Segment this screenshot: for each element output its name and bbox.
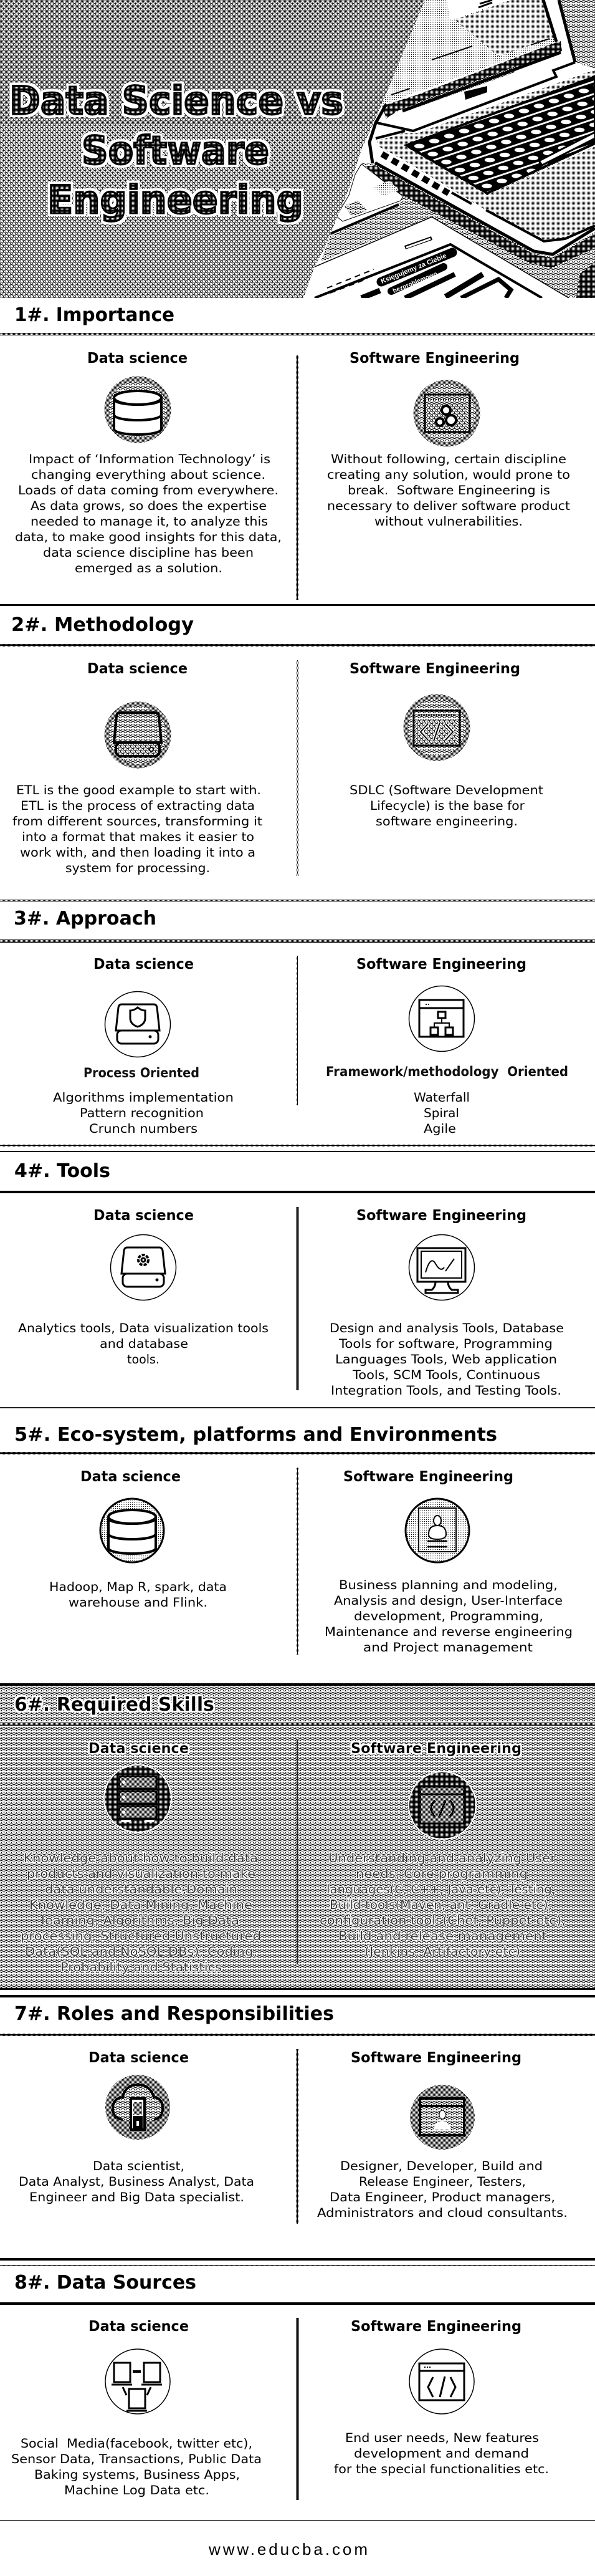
text: software engineering: creating any solution, would prone to bbox=[327, 468, 570, 482]
text: software engineering bbox=[325, 1578, 573, 1655]
list: software engineering: Agile bbox=[424, 1122, 456, 1136]
column title: software engineering: Software Engineering bbox=[350, 661, 520, 677]
column title: software engineering: Software Engineering bbox=[350, 350, 520, 367]
footer url: www.educba.com bbox=[208, 2540, 368, 2559]
text: software engineering: Build and release management bbox=[338, 1929, 547, 1943]
icon: database bbox=[105, 377, 171, 443]
text: software engineering: Languages Tools, Web application bbox=[335, 1352, 557, 1367]
column title: data science: Data science bbox=[88, 2319, 189, 2335]
column title: software engineering: Software Engineering bbox=[351, 1741, 521, 1757]
icon: networked computers bbox=[105, 2349, 170, 2414]
text: data science: Social Media(facebook, twitter etc), bbox=[21, 2436, 252, 2451]
text: data science bbox=[12, 783, 262, 875]
text: data science: work with, and then loading it into a bbox=[20, 845, 255, 860]
section 1: importance bbox=[0, 304, 595, 606]
icon: code window outline bbox=[409, 2349, 474, 2414]
text: data science: system for processing. bbox=[65, 861, 210, 875]
laptop photo: bezproblemowo bbox=[392, 271, 439, 295]
section 3: approach bbox=[0, 908, 595, 1152]
text: data science bbox=[11, 2436, 262, 2497]
list: software engineering: Spiral bbox=[424, 1106, 459, 1120]
list: data science: Algorithms implementation bbox=[53, 1090, 234, 1105]
text: software engineering: Tools, SCM Tools, Continuous bbox=[352, 1368, 540, 1382]
text: software engineering: Design and analysis Tools, Database bbox=[330, 1321, 564, 1335]
text: data science bbox=[15, 452, 282, 575]
panel background bbox=[0, 1686, 595, 1988]
text: data science: Knowledge about how to build data bbox=[24, 1851, 258, 1865]
column title: software engineering: Software Engineering bbox=[351, 2050, 521, 2066]
text: data science: Probability and Statistics bbox=[60, 1960, 222, 1974]
icon: database with texture bbox=[100, 1499, 164, 1562]
column title: data science: Data science bbox=[88, 2050, 189, 2066]
text: data science: As data grows, so does the expertise bbox=[31, 499, 267, 513]
text: software engineering: (Jenkins, Artifactory etc) bbox=[364, 1944, 520, 1959]
text: software engineering: necessary to deliver software product bbox=[327, 499, 570, 513]
column title: data science: Data science bbox=[88, 1741, 189, 1757]
section 6: required skills bbox=[0, 1686, 595, 1997]
text: data science bbox=[21, 1851, 261, 1974]
text: software engineering: without vulnerabilities. bbox=[374, 514, 523, 529]
text: data science: Data scientist, bbox=[93, 2159, 184, 2173]
text: software engineering: Maintenance and reverse engineering bbox=[325, 1625, 573, 1639]
list: data science: Pattern recognition bbox=[80, 1106, 204, 1120]
text: data science: Data Analyst, Business Analyst, Data bbox=[19, 2175, 254, 2189]
text: software engineering: and Project management bbox=[363, 1640, 533, 1655]
header banner bbox=[0, 0, 595, 298]
text: software engineering: break. Software Engineering is bbox=[348, 483, 550, 497]
text: software engineering: Tools for software, Programming bbox=[338, 1337, 553, 1351]
text: software engineering: for the special functionalities etc. bbox=[334, 2462, 549, 2476]
icon: cloud with lock bbox=[105, 2075, 170, 2140]
title bbox=[9, 78, 343, 223]
column title: data science: Data science bbox=[87, 350, 188, 367]
text: data science: ETL is the process of extracting data bbox=[21, 799, 255, 813]
column title: data science: Data science bbox=[80, 1469, 181, 1485]
text: data science: Knowledge, Data Mining, Machine bbox=[29, 1898, 252, 1912]
column title: data science: Data science bbox=[93, 956, 194, 973]
text: software engineering: Without following, certain discipline bbox=[331, 452, 566, 466]
text: software engineering: Integration Tools, and Testing Tools. bbox=[331, 1383, 561, 1398]
text: data science: Analytics tools, Data visualization tools bbox=[18, 1321, 269, 1335]
text: software engineering: Release Engineer, Testers, bbox=[359, 2175, 526, 2189]
text: software engineering bbox=[334, 2431, 549, 2476]
heading: 7#. Roles and Responsibilities bbox=[14, 2003, 334, 2025]
icon: profile document bbox=[406, 1499, 469, 1562]
text: data science: Machine Log Data etc. bbox=[64, 2483, 209, 2497]
text: data science: learning, Algorithms, Big Data bbox=[41, 1913, 239, 1928]
text: software engineering: development, Programming, bbox=[354, 1609, 543, 1623]
text: data science: tools. bbox=[127, 1352, 159, 1367]
text: data science: Impact of ‘Information Technology’ is bbox=[29, 452, 270, 466]
text: software engineering: software engineering. bbox=[376, 814, 518, 829]
text: data science: needed to manage it, to analyze this bbox=[31, 514, 268, 529]
text: software engineering: Data Engineer, Product managers, bbox=[330, 2190, 555, 2204]
heading: 2#. Methodology bbox=[11, 614, 194, 636]
section 8: data sources bbox=[0, 2272, 595, 2521]
column title: software engineering: Software Engineering bbox=[356, 956, 526, 973]
subtitle: process oriented: Process Oriented bbox=[83, 1065, 199, 1080]
text: software engineering: Designer, Developer, Build and bbox=[340, 2159, 543, 2173]
subtitle: framework oriented: Framework/methodology Oriented bbox=[326, 1064, 568, 1079]
title: Software bbox=[82, 128, 269, 173]
text: data science: Loads of data coming from everywhere. bbox=[18, 483, 278, 497]
text: data science: Engineer and Big Data specialist. bbox=[29, 2190, 244, 2204]
heading: 8#. Data Sources bbox=[14, 2272, 196, 2294]
text: data science: emerged as a solution. bbox=[75, 561, 222, 575]
text: data science: processing, Structured Unstructured bbox=[21, 1929, 261, 1943]
laptop photo: Księgujemy za Ciebie bbox=[380, 252, 447, 286]
icon: code window bbox=[404, 694, 470, 761]
icon: monitor with chart bbox=[409, 1234, 475, 1300]
column title: software engineering: Software Engineering bbox=[351, 2319, 521, 2335]
list: software engineering: Waterfall bbox=[414, 1090, 470, 1105]
text: software engineering: Build tools(Maven, ant, Gradle etc), bbox=[330, 1898, 552, 1912]
laptop photo bbox=[299, 0, 595, 298]
column title: data science: Data science bbox=[93, 1208, 194, 1224]
icon: hard drive with shield bbox=[105, 991, 171, 1057]
icon: server rack bbox=[103, 1764, 172, 1833]
heading: 6#. Required Skills bbox=[14, 1694, 214, 1716]
list: data science bbox=[53, 1090, 234, 1136]
icon: hard drive with gear bbox=[111, 1234, 176, 1300]
text: software engineering bbox=[320, 1851, 566, 1959]
text: data science: and database bbox=[100, 1337, 188, 1351]
text: data science: changing everything about science. bbox=[31, 468, 265, 482]
heading: 1#. Importance bbox=[14, 304, 174, 326]
text: data science bbox=[19, 2159, 254, 2204]
text: software engineering: languages(C, C++, Java etc), Testing, bbox=[326, 1882, 556, 1896]
icon: window with gears bbox=[414, 380, 480, 446]
column title: data science: Data science bbox=[87, 661, 188, 677]
text: data science bbox=[18, 1321, 269, 1367]
section 5: eco-system bbox=[0, 1424, 595, 1686]
heading: 4#. Tools bbox=[14, 1160, 110, 1182]
column title: software engineering: Software Engineering bbox=[343, 1469, 513, 1485]
text: data science: Sensor Data, Transactions, Public Data bbox=[11, 2452, 262, 2466]
text: software engineering: needs, Core programming bbox=[356, 1867, 528, 1881]
text: software engineering: SDLC (Software Development bbox=[350, 783, 543, 797]
section 4: tools bbox=[0, 1160, 595, 1408]
heading: 5#. Eco-system, platforms and Environments bbox=[14, 1424, 497, 1446]
heading: 3#. Approach bbox=[14, 908, 156, 930]
text: software engineering bbox=[327, 452, 570, 529]
text: data science: ETL is the good example to start with. bbox=[16, 783, 261, 797]
text: data science: data science discipline has been bbox=[43, 545, 254, 560]
text: data science: warehouse and Flink. bbox=[69, 1595, 207, 1610]
text: software engineering: Lifecycle) is the base for bbox=[370, 799, 525, 813]
icon: dark code window bbox=[408, 1771, 477, 1840]
title: Data Science vs bbox=[9, 78, 343, 123]
icon: window with hierarchy bbox=[409, 986, 475, 1051]
text: data science: products and visualization to make bbox=[27, 1867, 255, 1881]
icon: hard drive bbox=[105, 702, 171, 768]
text: software engineering: configuration tools(Chef, Puppet etc), bbox=[320, 1913, 566, 1928]
text: data science: from different sources, transforming it bbox=[12, 814, 262, 829]
section 7: roles and responsibilities bbox=[0, 2003, 595, 2266]
list: data science: Crunch numbers bbox=[89, 1122, 198, 1136]
title: Engineering bbox=[47, 177, 303, 223]
text: software engineering: Business planning and modeling, bbox=[339, 1578, 558, 1592]
text: data science: Baking systems, Business Apps, bbox=[34, 2468, 240, 2482]
icon: window with user bbox=[410, 2085, 475, 2150]
text: data science bbox=[49, 1580, 227, 1610]
text: software engineering bbox=[350, 783, 543, 829]
text: software engineering: Analysis and design, User-Interface bbox=[334, 1593, 563, 1608]
text: software engineering bbox=[317, 2159, 568, 2220]
text: software engineering: End user needs, New features bbox=[345, 2431, 539, 2445]
text: software engineering: Administrators and cloud consultants. bbox=[317, 2206, 568, 2220]
text: data science: data understandable,Domain bbox=[45, 1882, 237, 1896]
column title: software engineering: Software Engineering bbox=[356, 1208, 526, 1224]
text: software engineering bbox=[330, 1321, 564, 1398]
text: data science: Data(SQL and NoSQL DBs), Coding, bbox=[25, 1944, 257, 1959]
text: software engineering: Understanding and analyzing User bbox=[328, 1851, 556, 1865]
list: software engineering bbox=[414, 1090, 470, 1136]
text: data science: into a format that makes it easier to bbox=[22, 830, 254, 844]
text: software engineering: development and demand bbox=[354, 2446, 529, 2461]
section 2: methodology bbox=[0, 614, 595, 901]
text: data science: data, to make good insights for this data, bbox=[15, 530, 282, 544]
text: data science: Hadoop, Map R, spark, data bbox=[49, 1580, 227, 1594]
